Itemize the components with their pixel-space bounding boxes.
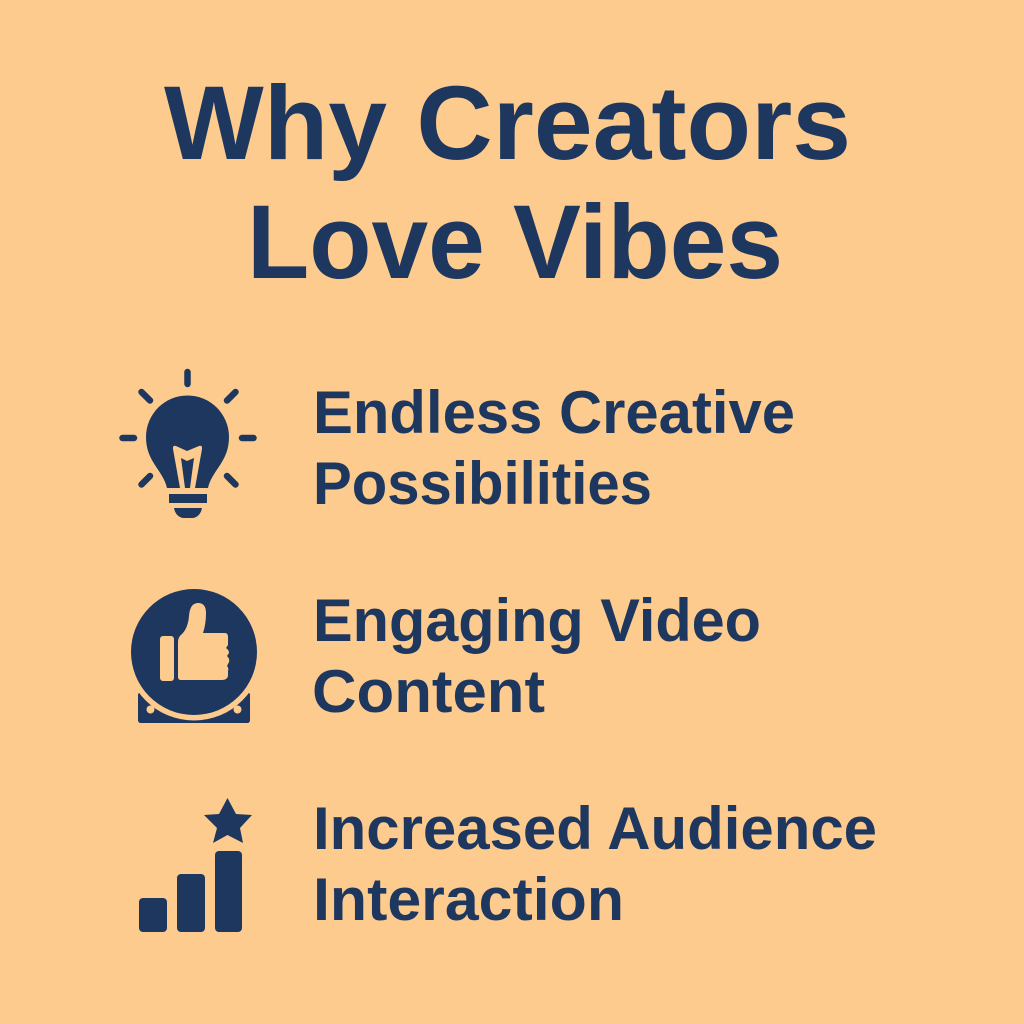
title: [164, 65, 851, 301]
item 2 text: [312, 587, 761, 725]
item 3 text: Interaction: [313, 866, 624, 933]
icon: light bulb: [122, 372, 254, 518]
item 3 text: [313, 795, 877, 933]
item 1 text: Endless Creative: [313, 379, 795, 446]
item 1 text: [313, 379, 795, 517]
icon: rising bars with star: [139, 798, 252, 932]
icon: thumbs up badge: [126, 584, 262, 723]
title: Why Creators: [164, 65, 851, 182]
item 2 text: Content: [312, 658, 545, 725]
item 3 text: Increased Audience: [313, 795, 877, 862]
title: Love Vibes: [247, 184, 783, 301]
item 2 text: Engaging Video: [313, 587, 761, 654]
item 1 text: Possibilities: [313, 450, 652, 517]
